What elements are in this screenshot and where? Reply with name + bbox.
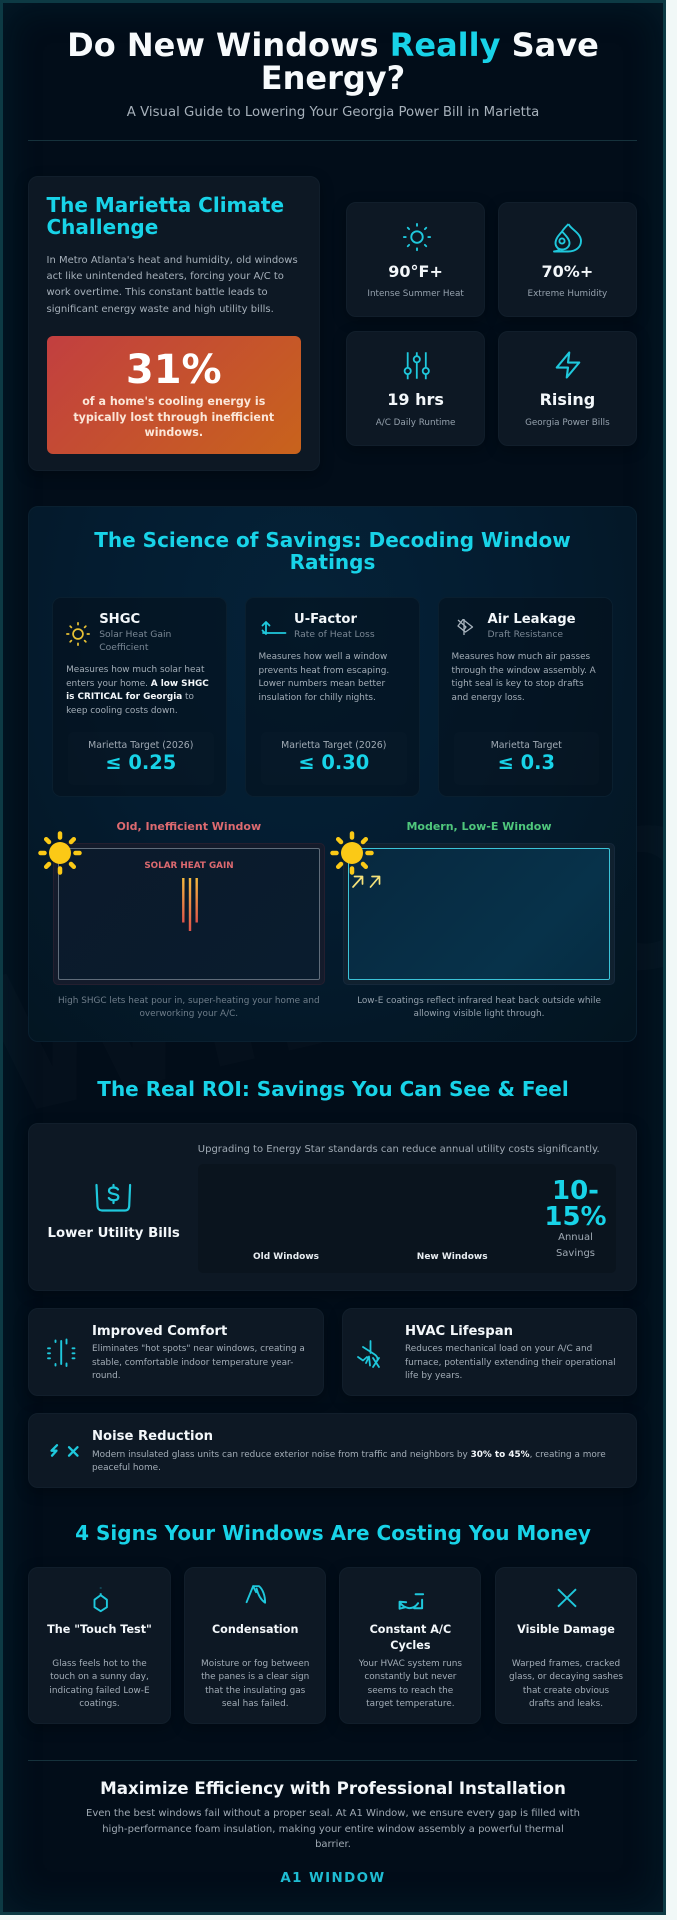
icon: droplets [553, 223, 582, 252]
window caption: allowing visible light through. [414, 1009, 544, 1019]
rating description: Lower numbers mean better [258, 679, 385, 689]
icon: wallet dollar [95, 1184, 132, 1212]
sign text: that the insulating gas [205, 1686, 305, 1696]
benefit: noise reduction [28, 1413, 637, 1488]
window caption: Low-E coatings reflect infrared heat back outside while [357, 996, 601, 1006]
sign text: coatings. [79, 1699, 120, 1709]
icon: muted sound [50, 1444, 79, 1457]
rating description: Measures how much air passes [452, 652, 590, 662]
sign text: constantly but never [364, 1672, 456, 1682]
sign text [201, 1659, 309, 1709]
window caption [357, 996, 601, 1019]
reflected arrows [352, 876, 380, 888]
sign text: Moisture or fog between [201, 1659, 309, 1669]
savings caption: Savings [556, 1248, 595, 1259]
sign title: Cycles [390, 1639, 430, 1652]
icon: lightning bolt [556, 351, 580, 379]
title: Do New Windows Really Save [67, 26, 599, 64]
stat: summer heat [346, 202, 485, 317]
stat label: Intense Summer Heat [367, 289, 464, 299]
panel: science of savings [28, 506, 637, 1042]
callout text [73, 395, 274, 439]
benefit text: life by years. [405, 1371, 462, 1381]
rating description: insulation for chilly nights. [258, 692, 376, 702]
heat label: SOLAR HEAT GAIN [144, 861, 234, 871]
stat: humidity [498, 202, 637, 317]
climate text block: significant energy waste and high utility bills. [46, 304, 274, 315]
rating description: Measures how well a window [258, 652, 387, 662]
heading: climate challenge: Challenge [46, 215, 158, 239]
sign text: Glass feels hot to the [52, 1659, 147, 1669]
window diagram: modern low-e [330, 820, 615, 1019]
rating description [452, 652, 596, 702]
rating description: prevents heat from escaping. [258, 666, 389, 676]
window diagram: old inefficient [38, 820, 325, 1019]
footer text: barrier. [315, 1839, 351, 1850]
stat label: Georgia Power Bills [525, 418, 610, 428]
benefit intro text: Upgrading to Energy Star standards can reduce annual utility costs significantly. [198, 1144, 600, 1155]
icon: heat loss arrow [262, 621, 286, 635]
target label: Marietta Target [491, 740, 562, 751]
stat value: 19 hrs [387, 390, 444, 409]
window glass [348, 848, 610, 980]
sign text: target temperature. [366, 1699, 455, 1709]
sign title: Constant A/C [370, 1623, 451, 1636]
target value: ≤ 0.3 [498, 751, 555, 774]
target box [261, 732, 407, 785]
heading: climate challenge [46, 193, 284, 239]
footer text: Even the best windows fail without a proper seal. At A1 Window, we ensure every gap is filled with [86, 1808, 580, 1819]
sign text [340, 1658, 480, 1712]
sign title [370, 1623, 451, 1652]
climate text block: act like unintended heaters, forcing your A/C to [46, 271, 284, 282]
rating card: SHGC [52, 597, 227, 797]
stat: runtime [346, 331, 485, 446]
icon: thermostat bars [47, 1338, 76, 1367]
sign text: seems to reach the [368, 1686, 453, 1696]
window glass [58, 848, 320, 980]
rating description: enters your home. A low SHGC [66, 679, 209, 689]
icon: sliders [404, 352, 430, 380]
benefit text [405, 1344, 616, 1381]
benefit title: Noise Reduction [92, 1429, 213, 1444]
sun [38, 831, 82, 875]
sign title: Visible Damage [517, 1623, 615, 1636]
icon: crack x [555, 1586, 579, 1610]
rating name: U-Factor [294, 612, 357, 627]
stat value: Rising [540, 390, 595, 409]
savings percent [544, 1176, 607, 1232]
stat label: A/C Daily Runtime [376, 418, 455, 428]
savings figure [544, 1176, 607, 1259]
stat value: 90°F+ [388, 262, 443, 281]
rating card: U-Factor [245, 597, 420, 797]
icon: wind kite [457, 618, 474, 635]
window frame [343, 843, 615, 985]
sign text: seal has failed. [222, 1699, 289, 1709]
sun [330, 831, 374, 875]
sign card: visible damage [495, 1567, 637, 1724]
benefit label: Lower Utility Bills [48, 1226, 180, 1241]
window label: Old, Inefficient Window [116, 820, 261, 833]
callout: 31 percent [46, 336, 301, 454]
sign text [496, 1658, 636, 1712]
sign title: The "Touch Test" [47, 1623, 152, 1636]
stat: power bills [498, 331, 637, 446]
window label: Modern, Low-E Window [406, 820, 552, 833]
callout text: windows. [144, 426, 203, 439]
savings caption: Annual [558, 1232, 593, 1243]
sign text [49, 1659, 150, 1709]
benefit: HVAC lifespan [342, 1308, 637, 1396]
heading: climate challenge: The Marietta Climate [46, 193, 284, 217]
sign title: Condensation [212, 1623, 298, 1636]
sign text: indicating failed Low-E [49, 1686, 150, 1696]
heat rays [182, 878, 198, 931]
heading: science of savings [94, 528, 571, 574]
sign text: that create obvious [523, 1686, 609, 1696]
rating description [66, 665, 209, 716]
savings caption [556, 1232, 595, 1259]
heading: science of savings: Ratings [290, 550, 375, 574]
rating subtitle [99, 629, 171, 653]
heading: science of savings: The Science of Savings: Decoding Window [94, 528, 571, 552]
icon: condensation [246, 1585, 266, 1604]
sign card: constant AC cycles [339, 1567, 481, 1724]
rating subtitle: Draft Resistance [488, 629, 563, 640]
benefit text: furnace, potentially extending their operational [405, 1358, 616, 1368]
benefit title: HVAC Lifespan [405, 1324, 513, 1339]
icon: sun [403, 223, 431, 252]
benefit text: stable, comfortable indoor temperature year- [92, 1358, 293, 1368]
icon: cycle arrow [398, 1593, 424, 1610]
target label: Marietta Target (2026) [88, 740, 193, 751]
sign text: drafts and leaks. [529, 1699, 603, 1709]
rating description: Measures how much solar heat [66, 665, 204, 675]
target box [68, 732, 214, 785]
footer text: high-performance foam insulation, making your entire window assembly a powerful thermal [102, 1824, 564, 1835]
rating subtitle: Rate of Heat Loss [294, 629, 375, 640]
climate text block: In Metro Atlanta's heat and humidity, old windows [46, 255, 298, 266]
heading: real ROI: The Real ROI: Savings You Can See & Feel [97, 1077, 569, 1101]
rating description: and energy loss. [452, 692, 525, 702]
title: Energy? [261, 59, 405, 97]
sign text: glass, or decaying sashes [509, 1672, 623, 1682]
stat value: 70%+ [542, 262, 593, 281]
rating description: through the window assembly. A [452, 666, 596, 676]
target value: ≤ 0.25 [105, 751, 176, 774]
panel: lower utility bills [28, 1123, 637, 1291]
callout text: typically lost through inefficient [73, 410, 274, 424]
brand: A1 WINDOW [280, 1871, 386, 1886]
rating subtitle: Solar Heat Gain [99, 629, 171, 640]
sign text: touch on a sunny day, [50, 1672, 149, 1682]
benefit text: Reduces mechanical load on your A/C and [405, 1344, 592, 1354]
sign card: condensation [184, 1567, 326, 1724]
benefit text [92, 1450, 606, 1473]
benefit title: Improved Comfort [92, 1324, 227, 1339]
bar label: old: Old Windows [253, 1252, 319, 1262]
benefit text: Modern insulated glass units can reduce exterior noise from traffic and neighbors by 30% to 45%, creating a more [92, 1450, 606, 1460]
climate text block: work overtime. This constant battle leads to [46, 287, 268, 298]
rating name: SHGC [99, 612, 140, 627]
climate text block [46, 255, 298, 315]
window frame [53, 843, 325, 985]
sign card: touch test [28, 1567, 171, 1724]
icon: hot drop [94, 1588, 108, 1612]
sign text: Warped frames, cracked [512, 1659, 620, 1669]
bar label: new: New Windows [417, 1252, 488, 1262]
window caption [58, 996, 320, 1019]
bar chart area [198, 1164, 616, 1273]
sign text: Your HVAC system runs [359, 1659, 462, 1669]
savings percent: 10- [552, 1176, 599, 1206]
rating subtitle: Coefficient [99, 642, 148, 653]
subtitle: A Visual Guide to Lowering Your Georgia Power Bill in Marietta [127, 105, 539, 120]
target value: ≤ 0.30 [298, 751, 369, 774]
rating description [258, 652, 389, 702]
benefit text: peaceful home. [92, 1463, 161, 1473]
rating description: tight seal is key to stop drafts [452, 679, 584, 689]
footer [0, 1775, 666, 1890]
icon: yellow sun [66, 622, 90, 646]
benefit text [92, 1344, 305, 1381]
target label: Marietta Target (2026) [281, 740, 386, 751]
callout number: 31% [126, 346, 222, 392]
rating description: keep cooling costs down. [66, 706, 178, 716]
panel: climate challenge [28, 176, 320, 471]
title [67, 26, 599, 97]
window caption: overworking your A/C. [139, 1009, 238, 1019]
rating name: Air Leakage [488, 612, 576, 627]
benefit: improved comfort [28, 1308, 324, 1396]
rating card: Air Leakage [438, 597, 612, 797]
footer heading: Maximize Efficiency with Professional Installation [100, 1778, 566, 1798]
footer text [0, 1806, 666, 1853]
benefit text: round. [92, 1371, 121, 1381]
stat label: Extreme Humidity [528, 289, 607, 299]
icon: hvac fan [357, 1340, 380, 1368]
window caption: High SHGC lets heat pour in, super-heating your home and [58, 996, 320, 1006]
callout text: of a home's cooling energy is [82, 395, 265, 408]
benefit text: Eliminates "hot spots" near windows, creating a [92, 1344, 305, 1354]
savings percent: 15% [544, 1202, 607, 1232]
rating description: is CRITICAL for Georgia to [66, 692, 194, 702]
target box [454, 732, 599, 785]
heading: four signs: 4 Signs Your Windows Are Costing You Money [75, 1521, 591, 1545]
sign text: the panes is a clear sign [201, 1672, 309, 1682]
